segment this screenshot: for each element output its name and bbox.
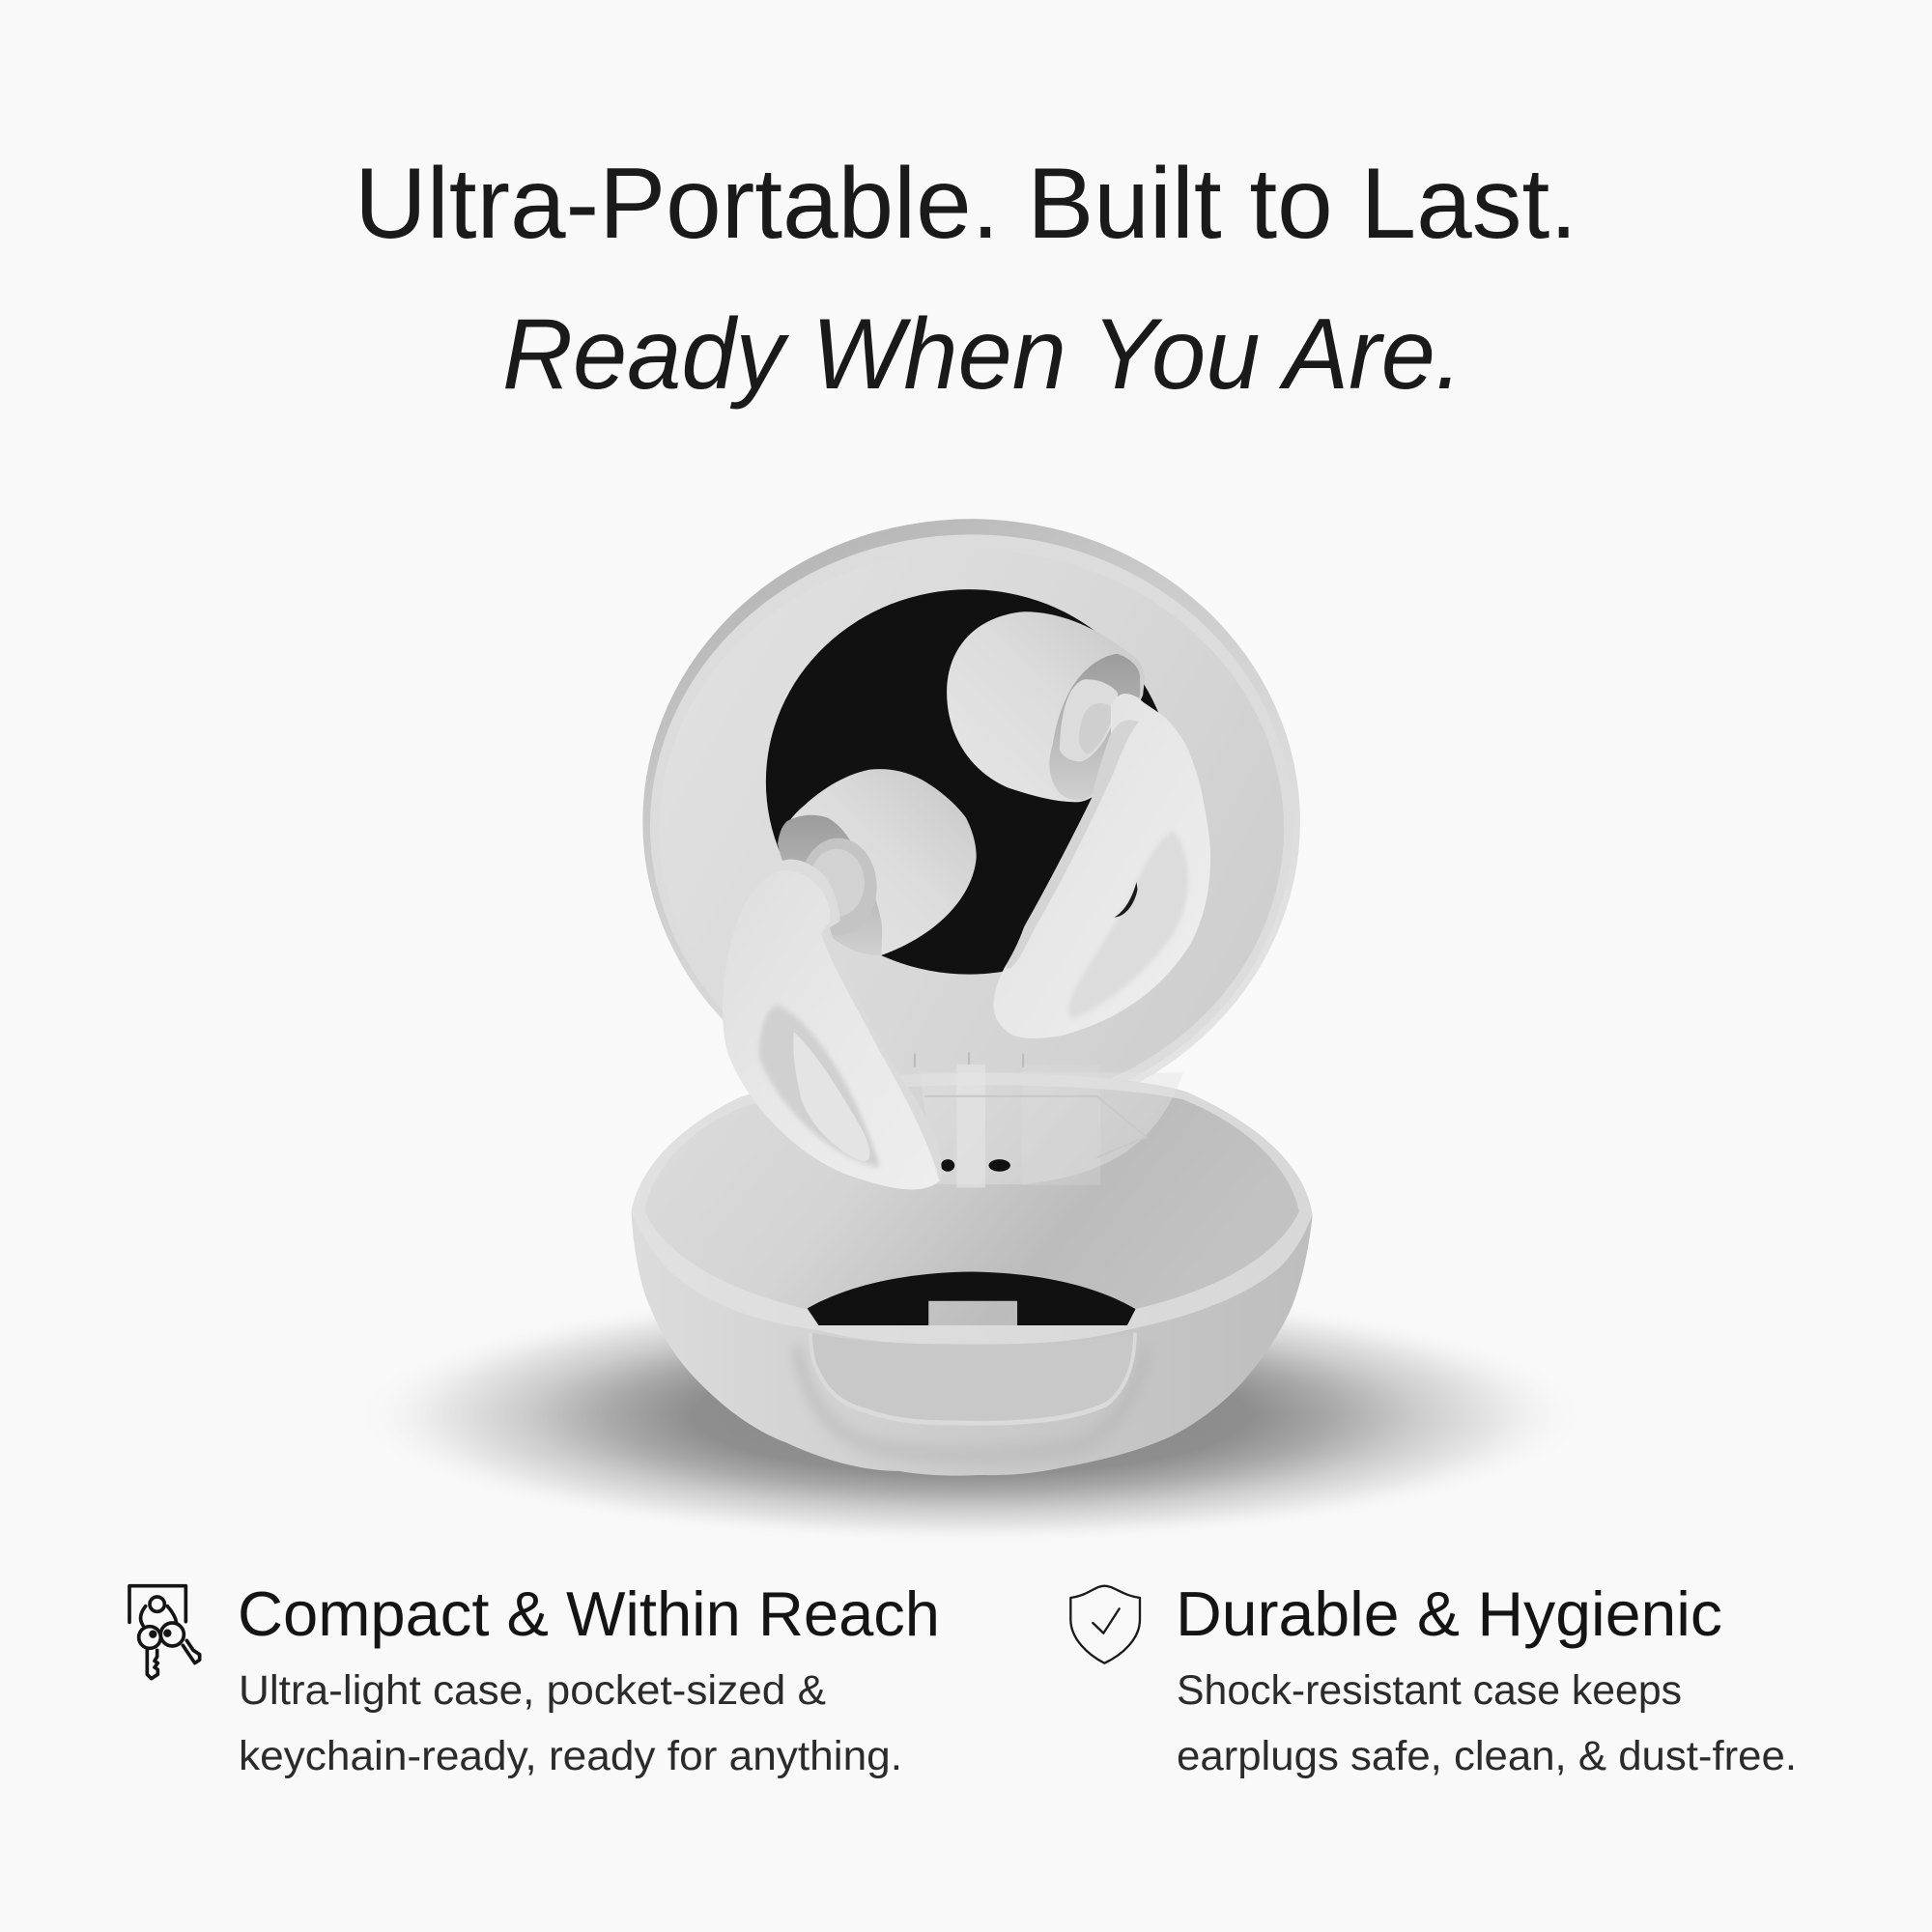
title line 1: Ultra-Portable. Built to Last. bbox=[355, 148, 1577, 260]
right earplug body bbox=[994, 694, 1210, 1038]
left eartip bbox=[777, 769, 977, 955]
bowl base bbox=[632, 1052, 1313, 1476]
ground shadow bbox=[353, 1285, 1589, 1546]
title line 2: Ready When You Are. bbox=[502, 298, 1463, 411]
description: Shock-resistant case keeps bbox=[1177, 1667, 1682, 1714]
feature: durable & hygienic bbox=[1070, 1578, 1797, 1779]
heading: Durable & Hygienic bbox=[1176, 1578, 1722, 1649]
description: keychain-ready, ready for anything. bbox=[239, 1733, 902, 1779]
black lid liner bbox=[766, 589, 1172, 975]
body bevel bbox=[821, 923, 942, 1181]
description bbox=[1177, 1667, 1797, 1779]
description bbox=[239, 1667, 902, 1779]
left earplug body bbox=[723, 870, 942, 1189]
case latch bbox=[796, 1333, 1147, 1456]
description: earplugs safe, clean, & dust-free. bbox=[1177, 1733, 1797, 1779]
product: earplugs in open case bbox=[632, 519, 1313, 1476]
title bbox=[355, 148, 1577, 411]
right stem rings bbox=[1060, 679, 1118, 761]
icon: keys on hook bbox=[129, 1586, 200, 1679]
heading: Compact & Within Reach bbox=[238, 1578, 940, 1649]
icon: shield with check bbox=[1070, 1586, 1140, 1663]
left stem rings bbox=[800, 838, 877, 936]
black base liner bbox=[808, 1272, 1136, 1325]
body bevel bbox=[1005, 720, 1139, 969]
bowl interior bbox=[644, 1085, 1299, 1325]
body hollow bbox=[1068, 831, 1188, 1018]
right eartip bbox=[947, 611, 1145, 802]
feature: compact & within reach bbox=[129, 1578, 940, 1779]
body hollow bbox=[759, 1005, 880, 1168]
case lid bbox=[642, 519, 1300, 1124]
description: Ultra-light case, pocket-sized & bbox=[239, 1667, 826, 1714]
rim band bbox=[632, 1073, 1313, 1345]
lid hinge bbox=[915, 1052, 1183, 1188]
